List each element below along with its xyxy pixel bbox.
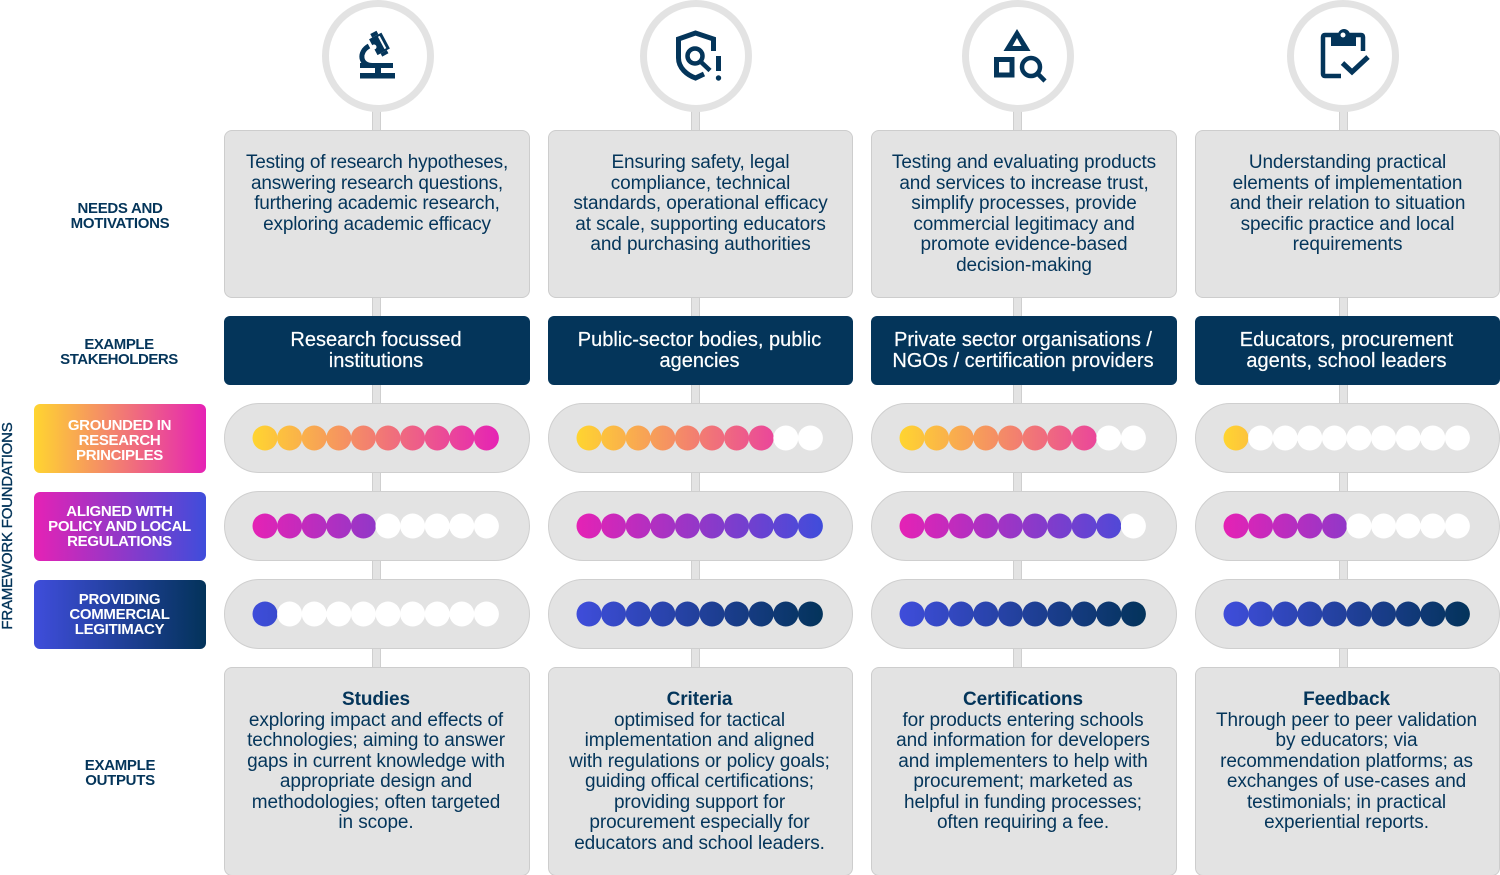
row label: example outputs: OUTPUTS	[85, 772, 155, 789]
row label: example outputs	[85, 757, 155, 789]
rating pill: public, aligned 10 of 10	[548, 491, 853, 561]
foundation label: commercial legitimacy	[34, 580, 206, 649]
panel: needs, research: furthering academic research,	[254, 193, 500, 214]
panel: output, criteria: optimised for tactical	[614, 710, 785, 730]
panel: output, criteria	[548, 667, 853, 875]
rating pill: educators, grounded 1 of 10	[1195, 403, 1500, 473]
panel: needs, educators: requirements	[1293, 234, 1402, 255]
row label: needs and motivations: MOTIVATIONS	[71, 215, 169, 232]
panel: needs, private sector: simplify processes, provide	[911, 193, 1137, 214]
panel: output, feedback	[1195, 667, 1500, 875]
panel: needs, private sector: and services to increase trust,	[899, 172, 1149, 194]
rating pill: educators, commercial 10 of 10	[1195, 579, 1500, 649]
stakeholder: public sector: Public-sector bodies, public	[578, 329, 821, 351]
panel: needs, research	[224, 130, 530, 298]
panel: output, certifications: often requiring a fee.	[937, 812, 1109, 833]
panel: needs, educators: elements of implementation	[1233, 172, 1462, 194]
panel: output, feedback: Through peer to peer validation	[1216, 710, 1477, 730]
panel: needs, private sector	[871, 130, 1177, 298]
icon: microscope	[322, 0, 434, 112]
rating pill: research, commercial 1 of 10	[224, 579, 530, 649]
panel: output, studies: methodologies; often targeted	[252, 792, 500, 812]
foundation label: grounded in research principles	[34, 404, 206, 473]
panel: needs, private sector: decision-making	[956, 254, 1092, 276]
panel: output, feedback: Feedback	[1303, 689, 1390, 710]
stakeholder: public sector	[548, 316, 853, 385]
panel: output, criteria: procurement especially for	[589, 812, 810, 833]
panel: output, studies: exploring impact and effects of	[249, 710, 503, 730]
panel: output, criteria: with regulations or policy goals;	[569, 750, 830, 772]
stakeholder: private sector: NGOs / certification providers	[892, 350, 1154, 372]
panel: output, certifications: and implementers to help with	[898, 750, 1148, 772]
row label: example stakeholders: STAKEHOLDERS	[60, 351, 178, 368]
panel: output, studies: appropriate design and	[280, 771, 472, 792]
rating pill: private, commercial 10 of 10	[871, 579, 1177, 649]
panel: output, studies	[224, 667, 530, 875]
connector: column 1	[372, 100, 381, 670]
panel: needs, private sector: commercial legitimacy and	[913, 214, 1135, 234]
rating pill: public, commercial 10 of 10	[548, 579, 853, 649]
panel: output, feedback: recommendation platforms; as	[1220, 750, 1473, 772]
foundation label: grounded in research principles: GROUNDED IN	[68, 417, 171, 434]
panel: output, certifications: procurement; marketed as	[913, 771, 1133, 792]
stakeholder: public sector: agencies	[659, 350, 740, 372]
panel: needs, educators: and their relation to situation	[1230, 193, 1465, 214]
panel: output, criteria: providing support for	[614, 792, 785, 812]
foundation label: commercial legitimacy: COMMERCIAL	[69, 606, 170, 623]
foundation label: aligned with policy: POLICY AND LOCAL	[48, 518, 191, 535]
panel: output, criteria: educators and school leaders.	[574, 832, 825, 854]
stakeholder: research	[224, 316, 530, 385]
stakeholder: private sector	[871, 316, 1177, 385]
row label: example stakeholders: EXAMPLE	[84, 336, 154, 353]
row label: needs and motivations	[71, 200, 170, 232]
panel: output, studies: gaps in current knowledge with	[247, 750, 505, 772]
row label: example outputs: EXAMPLE	[85, 757, 155, 774]
foundation label: aligned with policy	[34, 492, 206, 561]
foundation label: aligned with policy: ALIGNED WITH	[66, 503, 173, 520]
panel: output, studies: in scope.	[338, 812, 414, 833]
panel: output, studies: technologies; aiming to answer	[247, 730, 505, 751]
stakeholder: educators: Educators, procurement	[1240, 329, 1453, 351]
rating pill: research, aligned 5 of 10	[224, 491, 530, 561]
stakeholder: research: Research focussed	[290, 329, 462, 351]
panel: output, certifications: for products entering schools	[902, 710, 1144, 730]
panel: output, feedback: by educators; via	[1276, 730, 1417, 751]
panel: output, feedback: testimonials; in practical	[1247, 792, 1446, 812]
row label: example stakeholders	[60, 336, 178, 368]
panel: needs, public sector	[548, 130, 853, 298]
row label: needs and motivations: NEEDS AND	[77, 200, 163, 217]
stakeholder: educators: agents, school leaders	[1246, 350, 1447, 372]
panel: output, studies: Studies	[342, 689, 410, 710]
stakeholder: research: institutions	[329, 350, 423, 372]
panel: needs, educators	[1195, 130, 1500, 298]
foundation label: grounded in research principles: PRINCIPLES	[76, 447, 163, 464]
panel: needs, public sector: standards, operational efficacy	[573, 193, 828, 214]
panel: needs, educators: Understanding practical	[1249, 152, 1446, 173]
foundation label: commercial legitimacy: PROVIDING	[79, 591, 160, 608]
panel: output, feedback: experiential reports.	[1264, 812, 1429, 833]
panel: output, criteria: Criteria	[667, 689, 732, 710]
rating pill: private, aligned 9 of 10	[871, 491, 1177, 561]
stakeholder: private sector: Private sector organisations /	[894, 329, 1152, 351]
panel: output, criteria: implementation and aligned	[585, 730, 814, 751]
panel: needs, research: answering research questions,	[251, 172, 503, 194]
panel: needs, research: exploring academic efficacy	[263, 214, 491, 234]
panel: needs, private sector: Testing and evaluating products	[892, 152, 1156, 173]
panel: output, criteria: guiding offical certifications;	[585, 771, 814, 792]
connector: column 2	[691, 100, 700, 670]
icon: clipboard with check	[1287, 0, 1399, 112]
panel: needs, public sector: at scale, supporting educators	[575, 214, 826, 234]
foundation label: grounded in research principles: RESEARCH	[79, 432, 160, 449]
panel: needs, research: Testing of research hypotheses,	[246, 152, 508, 173]
rating pill: educators, aligned 5 of 10	[1195, 491, 1500, 561]
rating pill: public, grounded 8 of 10	[548, 403, 853, 473]
panel: output, certifications: and information for developers	[896, 730, 1150, 751]
panel: output, certifications: Certifications	[963, 689, 1083, 710]
panel: needs, public sector: Ensuring safety, legal	[611, 152, 790, 173]
rating pill: research, grounded 10 of 10	[224, 403, 530, 473]
connector: column 4	[1339, 100, 1348, 670]
panel: needs, public sector: and purchasing authorities	[590, 234, 811, 255]
stakeholder: educators	[1195, 316, 1500, 385]
foundation label: aligned with policy: REGULATIONS	[67, 533, 172, 550]
rating pill: private, grounded 8 of 10	[871, 403, 1177, 473]
icon: shapes with magnifier	[962, 0, 1074, 112]
panel: needs, educators: specific practice and local	[1241, 214, 1454, 234]
panel: needs, public sector: compliance, technical	[611, 172, 790, 194]
panel: output, feedback: exchanges of use-cases and	[1227, 771, 1466, 792]
icon: shield with magnifier and exclamation	[640, 0, 752, 112]
panel: output, certifications	[871, 667, 1177, 875]
panel: needs, private sector: promote evidence-based	[921, 234, 1127, 255]
panel: output, certifications: helpful in funding processes;	[904, 792, 1142, 812]
connector: column 3	[1013, 100, 1022, 670]
foundation label: commercial legitimacy: LEGITIMACY	[75, 621, 164, 638]
